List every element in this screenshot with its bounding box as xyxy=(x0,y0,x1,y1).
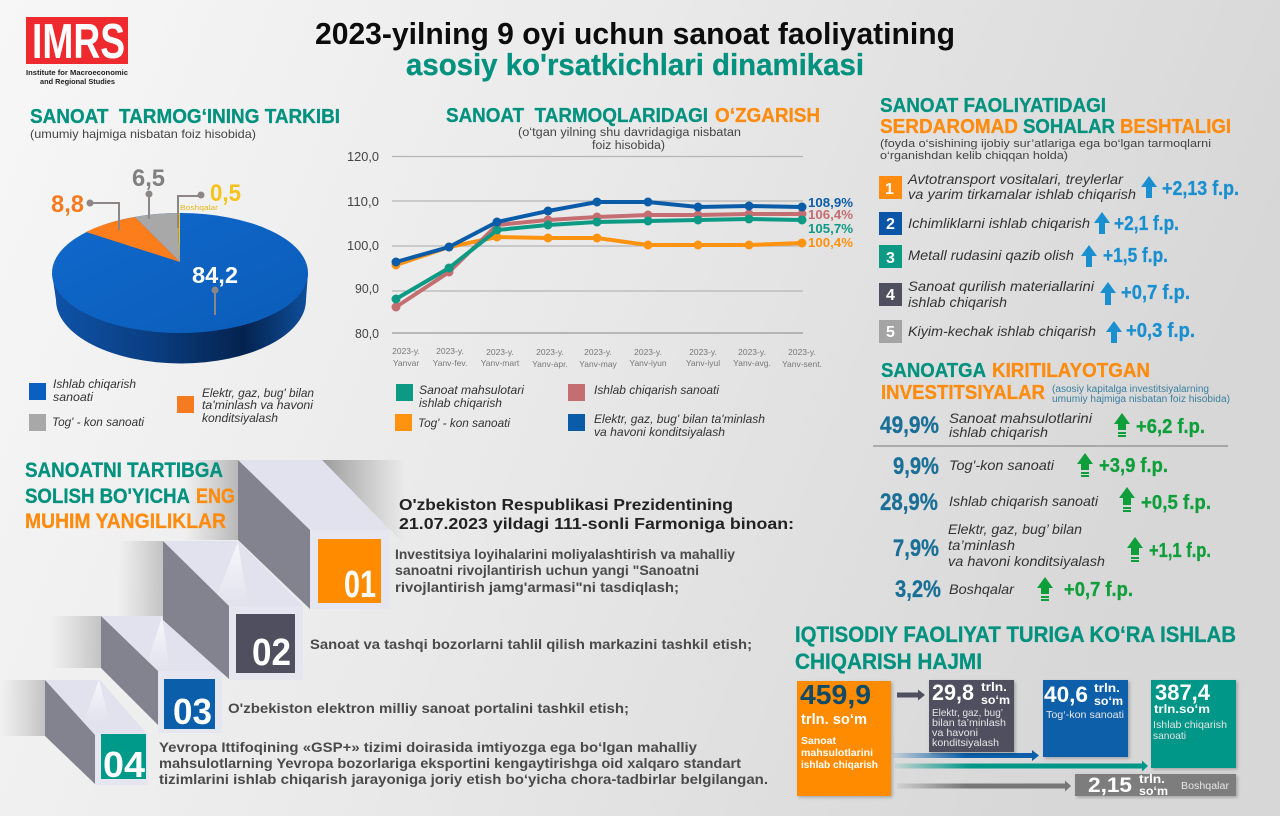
heading: investments: SANOATGA xyxy=(881,359,986,382)
box: 29,8 electricity: so‘m xyxy=(981,693,1010,707)
box: 29,8 electricity: 29,8 xyxy=(932,680,974,705)
panel: serdaromad sohalar beshtaligi xyxy=(879,94,1239,343)
row: 9,9% xyxy=(893,453,1168,480)
legend: pie: Tog' - kon sanoati xyxy=(52,415,144,429)
logo: IMRS: Institute for Macroeconomic xyxy=(26,68,128,77)
title: asosiy ko'rsatkichlari dinamikasi xyxy=(406,47,864,82)
pie chart xyxy=(51,165,308,364)
legend: line chart: Elektr, gaz, bug' bilan ta'minlash xyxy=(594,412,765,426)
text: item 01: Investitsiya loyihalarini moliyalashtirish va mahalliy xyxy=(395,546,735,562)
row: 49,9%: 49,9% xyxy=(880,412,939,439)
series: red xyxy=(392,210,806,311)
heading: production volume: IQTISODIY FAOLIYAT TURIGA KO‘RA ISHLAB xyxy=(795,622,1236,647)
row: 7,9%: 7,9% xyxy=(893,535,939,562)
list item 3: Metall rudasini qazib olish xyxy=(908,247,1074,263)
line chart: 2023-y. xyxy=(536,347,564,357)
logo: IMRS: IMRS xyxy=(32,15,125,69)
line chart: 100,0 xyxy=(347,238,379,253)
box: 2,15 others: so‘m xyxy=(1139,784,1168,798)
text: item 04: Yevropa Ittifoqining «GSP+» tizimi doirasida imtiyozga ega bo‘lgan mahalliy xyxy=(159,739,697,755)
line chart: 106,4% xyxy=(808,208,853,222)
line chart: 90,0 xyxy=(355,281,379,296)
arrow: to manufacturing xyxy=(895,760,1148,772)
list item 2 xyxy=(879,212,1179,235)
line chart: Yanv-apr. xyxy=(532,359,568,369)
series: green xyxy=(392,215,806,303)
pie chart: 6,5 xyxy=(132,165,165,192)
row: 3,2%: Boshqalar xyxy=(949,581,1015,597)
heading: sector change xyxy=(446,104,820,152)
text: decree intro: O'zbekiston Respublikasi Prezidentining xyxy=(399,497,733,514)
text: decree intro: 21.07.2023 yildagi 111-sonli Farmoniga binoan: xyxy=(399,516,794,533)
step 3 xyxy=(101,616,222,733)
line chart: 2023-y. xyxy=(689,347,717,357)
line chart: 120,0 xyxy=(347,149,379,164)
panel: sanoat tarmog'ining tarkibi xyxy=(29,105,340,431)
logo: IMRS xyxy=(26,15,128,86)
row: 7,9%: ta’minlash xyxy=(948,537,1015,553)
row: 28,9%: +0,5 f.p. xyxy=(1141,492,1211,514)
text: item 03: O'zbekiston elektron milliy sanoat portalini tashkil etish; xyxy=(228,700,629,716)
text: decree intro xyxy=(399,497,794,533)
box: 29,8 electricity xyxy=(929,680,1014,752)
box: 2,15 others: Boshqalar xyxy=(1181,781,1230,792)
row: 3,2% xyxy=(895,576,1133,603)
heading: top five profitable sectors: BESHTALIGI xyxy=(1120,115,1231,138)
row: 9,9%: 9,9% xyxy=(893,453,939,480)
list item 2: 2 xyxy=(886,216,895,233)
heading: investments: INVESTITSIYALAR xyxy=(881,381,1045,404)
box: 40,6 mining: Tog‘-kon sanoati xyxy=(1046,709,1124,721)
legend: line chart xyxy=(395,383,765,439)
box: total 459,9: trln. so‘m xyxy=(801,712,867,728)
step 4: 04 xyxy=(103,744,145,785)
legend: line chart: Ishlab chiqarish sanoati xyxy=(594,383,719,397)
heading: industry structure: SANOAT TARMOG‘INING TARKIBI xyxy=(30,105,340,128)
line chart: Yanvar xyxy=(393,358,419,368)
box: 2,15 others: 2,15 xyxy=(1088,774,1132,797)
list item 5: +0,3 f.p. xyxy=(1126,320,1195,342)
line chart: 108,9% xyxy=(808,196,853,210)
arrow: to mining xyxy=(893,750,1039,761)
box: 29,8 electricity: bilan ta’minlash xyxy=(932,717,1006,729)
step 2 xyxy=(163,541,303,680)
title: 2023-yilning 9 oyi uchun sanoat faoliyatining xyxy=(315,16,955,51)
heading: investments: (asosiy kapitalga investitsiyalarning xyxy=(1052,384,1209,395)
box: 387,4 manufacturing xyxy=(1151,680,1236,768)
box: 40,6 mining: so‘m xyxy=(1094,694,1123,708)
panel: sanoat tarmoqlaridagi o'zgarish xyxy=(347,104,853,439)
arrow: to others xyxy=(897,780,1071,792)
row: 49,9%: ishlab chiqarish xyxy=(949,424,1048,440)
logo: IMRS: and Regional Studies xyxy=(40,77,115,86)
line chart: 2023-y. xyxy=(392,346,420,356)
line chart: Yanv-mart xyxy=(481,358,520,368)
legend: pie xyxy=(29,377,314,431)
heading: investments xyxy=(881,359,1230,405)
box: 387,4 manufacturing: Ishlab chiqarish xyxy=(1153,719,1227,731)
list item 1: +2,13 f.p. xyxy=(1162,178,1239,200)
legend: pie: konditsiyalash xyxy=(202,411,278,425)
step 1 xyxy=(238,460,390,609)
panel: iqtisodiy faoliyat turiga ko'ra ishlab chiqarish hajmi xyxy=(795,622,1236,798)
line chart: Yanv-sent. xyxy=(782,359,822,369)
heading: regulation news: SOLISH BO'YICHA xyxy=(25,485,190,508)
heading: sector change: SANOAT TARMOQLARIDAGI xyxy=(446,104,708,127)
list item 1: va yarim tirkamalar ishlab chiqarish xyxy=(908,186,1136,202)
row: 7,9%: +1,1 f.p. xyxy=(1149,540,1211,562)
box: 40,6 mining: trln. xyxy=(1094,681,1120,695)
line chart: Yanv-iyul xyxy=(686,358,720,368)
row: 7,9%: Elektr, gaz, bug’ bilan xyxy=(948,521,1082,537)
row: 3,2%: 3,2% xyxy=(895,576,941,603)
text: item 04: tizimlarini ishlab chiqarish jarayoniga joriy etish bo‘yicha chora-tadbirlar belgilangan. xyxy=(159,771,768,787)
row: 49,9%: Sanoat mahsulotlarini xyxy=(949,410,1093,426)
series: blue xyxy=(392,198,806,266)
list item 2: +2,1 f.p. xyxy=(1114,213,1179,235)
pie chart: 84,2 xyxy=(192,262,238,288)
box: 29,8 electricity: Elektr, gaz, bug’ xyxy=(932,707,1003,719)
list item 1: Avtotransport vositalari, treylerlar xyxy=(907,171,1124,187)
text: item 04: mahsulotlarning Yevropa bozorlariga eksportini kengaytirishga oid xalqaro standart xyxy=(159,755,741,771)
box: 2,15 others xyxy=(1075,772,1236,798)
step shadows xyxy=(0,460,405,736)
list item 5 xyxy=(879,320,1195,343)
row: 28,9%: Ishlab chiqarish sanoati xyxy=(949,493,1099,509)
legend: pie: Ishlab chiqarish xyxy=(53,377,136,391)
heading: investments: umumiy hajmiga nisbatan foiz hisobida) xyxy=(1052,394,1230,405)
step 1: 01 xyxy=(344,564,376,606)
box: 29,8 electricity: va havoni xyxy=(932,727,978,739)
row: 49,9%: +6,2 f.p. xyxy=(1136,416,1205,438)
box: 2,15 others: trln. xyxy=(1139,772,1165,786)
box: 387,4 manufacturing: 387,4 xyxy=(1155,680,1211,705)
line chart xyxy=(347,149,853,369)
heading: industry structure xyxy=(30,105,340,141)
arrow: to electricity xyxy=(897,690,925,700)
box: total 459,9 xyxy=(797,679,891,796)
list item 4 xyxy=(879,278,1190,310)
list item 5: Kiyim-kechak ishlab chiqarish xyxy=(908,323,1096,339)
line chart: 105,7% xyxy=(808,222,853,236)
line chart: Yanv-iyun xyxy=(629,358,667,368)
list item 1: 1 xyxy=(885,181,894,198)
heading: top five profitable sectors xyxy=(880,94,1231,162)
series: orange xyxy=(392,233,806,269)
row: 9,9%: +3,9 f.p. xyxy=(1099,455,1168,477)
legend: line chart: va havoni konditsiyalash xyxy=(594,425,725,439)
box: 40,6 mining: 40,6 xyxy=(1044,682,1088,707)
text: item 01: rivojlantirish jamg'armasi"ni tasdiqlash; xyxy=(395,579,679,595)
list item 2: Ichimliklarni ishlab chiqarish xyxy=(908,215,1090,231)
box: total 459,9: 459,9 xyxy=(800,679,871,710)
heading: regulation news: ENG xyxy=(196,485,235,508)
box: 29,8 electricity: konditsiyalash xyxy=(932,737,999,749)
list item 3: 3 xyxy=(886,250,895,267)
text: item 01 xyxy=(395,546,735,595)
list item 4: 4 xyxy=(886,287,895,304)
heading: top five profitable sectors: SERDAROMAD xyxy=(880,115,1018,138)
box: 40,6 mining xyxy=(1043,680,1128,757)
line chart: Yanv-may xyxy=(579,359,618,369)
box: total 459,9: Sanoat xyxy=(801,735,836,747)
line chart: 2023-y. xyxy=(436,346,464,356)
text: item 04 xyxy=(159,739,768,787)
line chart: 2023-y. xyxy=(486,347,514,357)
list item 5: 5 xyxy=(886,324,895,341)
panel: sanoatga kiritilayotgan investitsiyalar xyxy=(873,359,1230,603)
title xyxy=(315,16,955,82)
text: item 02: Sanoat va tashqi bozorlarni tahlil qilish markazini tashkil etish; xyxy=(310,636,752,652)
line chart: 100,4% xyxy=(808,236,853,250)
line chart: 80,0 xyxy=(355,326,379,341)
line chart: 2023-y. xyxy=(788,347,816,357)
heading: production volume xyxy=(795,622,1236,674)
legend: pie: ta'minlash va havoni xyxy=(202,398,313,412)
pie chart: 8,8 xyxy=(51,191,84,218)
step 3: 03 xyxy=(173,691,212,732)
list item 4: Sanoat qurilish materiallarini xyxy=(908,278,1095,294)
pie chart: Boshqalar xyxy=(180,205,219,212)
heading: regulation news: MUHIM YANGILIKLAR xyxy=(25,510,226,533)
line chart: 2023-y. xyxy=(634,347,662,357)
legend: pie: sanoati xyxy=(53,390,93,404)
legend: line chart: ishlab chiqarish xyxy=(419,396,502,410)
box: total 459,9: ishlab chiqarish xyxy=(801,759,878,771)
heading: production volume: CHIQARISH HAJMI xyxy=(795,649,982,674)
heading: top five profitable sectors: (foyda o‘sishining ijobiy sur’atlariga ega bo‘lgan tarmoqlarni xyxy=(880,138,1211,150)
line chart: 2023-y. xyxy=(738,347,766,357)
row: 3,2%: +0,7 f.p. xyxy=(1064,579,1133,601)
list item 4: ishlab chiqarish xyxy=(908,294,1007,310)
row: 9,9%: Tog'-kon sanoati xyxy=(949,457,1055,473)
line chart: 110,0 xyxy=(347,194,379,209)
box: 387,4 manufacturing: sanoati xyxy=(1153,730,1186,742)
legend: line chart: Sanoat mahsulotari xyxy=(419,383,524,397)
legend: pie: Elektr, gaz, bug' bilan xyxy=(202,386,314,400)
box: total 459,9: mahsulotlarini xyxy=(801,747,873,759)
list item 4: +0,7 f.p. xyxy=(1121,282,1190,304)
box: 387,4 manufacturing: trln.so‘m xyxy=(1154,702,1210,716)
step 4 xyxy=(45,680,148,785)
heading: top five profitable sectors: SANOAT FAOLIYATIDAGI xyxy=(880,94,1106,117)
heading: regulation news xyxy=(25,459,235,533)
list item 3: +1,5 f.p. xyxy=(1103,245,1168,267)
box: 29,8 electricity: trln. xyxy=(981,680,1007,694)
pie chart: 0,5 xyxy=(210,180,241,207)
line chart: Yanv-fev. xyxy=(433,358,467,368)
heading: top five profitable sectors: o‘rganishdan kelib chiqqan holda) xyxy=(880,150,1068,162)
line chart: Yanv-avg. xyxy=(733,358,771,368)
list item 1 xyxy=(879,171,1239,202)
row: 7,9%: va havoni konditsiyalash xyxy=(948,553,1105,569)
step 2: 02 xyxy=(252,632,291,674)
panel: sanoatni tartibga solish staircase xyxy=(0,459,794,787)
text: item 01: sanoatni rivojlantirish uchun yangi "Sanoatni xyxy=(395,562,699,578)
row: 28,9% xyxy=(880,487,1211,516)
heading: top five profitable sectors: SOHALAR xyxy=(1023,115,1115,138)
heading: sector change: O‘ZGARISH xyxy=(715,104,820,127)
heading: sector change: foiz hisobida) xyxy=(592,140,665,152)
row: 28,9%: 28,9% xyxy=(880,489,938,516)
heading: investments: KIRITILAYOTGAN xyxy=(992,359,1150,382)
line chart: 2023-y. xyxy=(584,347,612,357)
heading: industry structure: (umumiy hajmiga nisbatan foiz hisobida) xyxy=(30,127,256,141)
row: 7,9% xyxy=(893,521,1211,569)
heading: regulation news: SANOATNI TARTIBGA xyxy=(25,459,223,482)
heading: sector change: (o‘tgan yilning shu davridagiga nisbatan xyxy=(518,127,741,139)
list item 3 xyxy=(879,245,1168,268)
legend: line chart: Tog' - kon sanoati xyxy=(418,416,510,430)
row: 49,9% xyxy=(880,410,1205,440)
